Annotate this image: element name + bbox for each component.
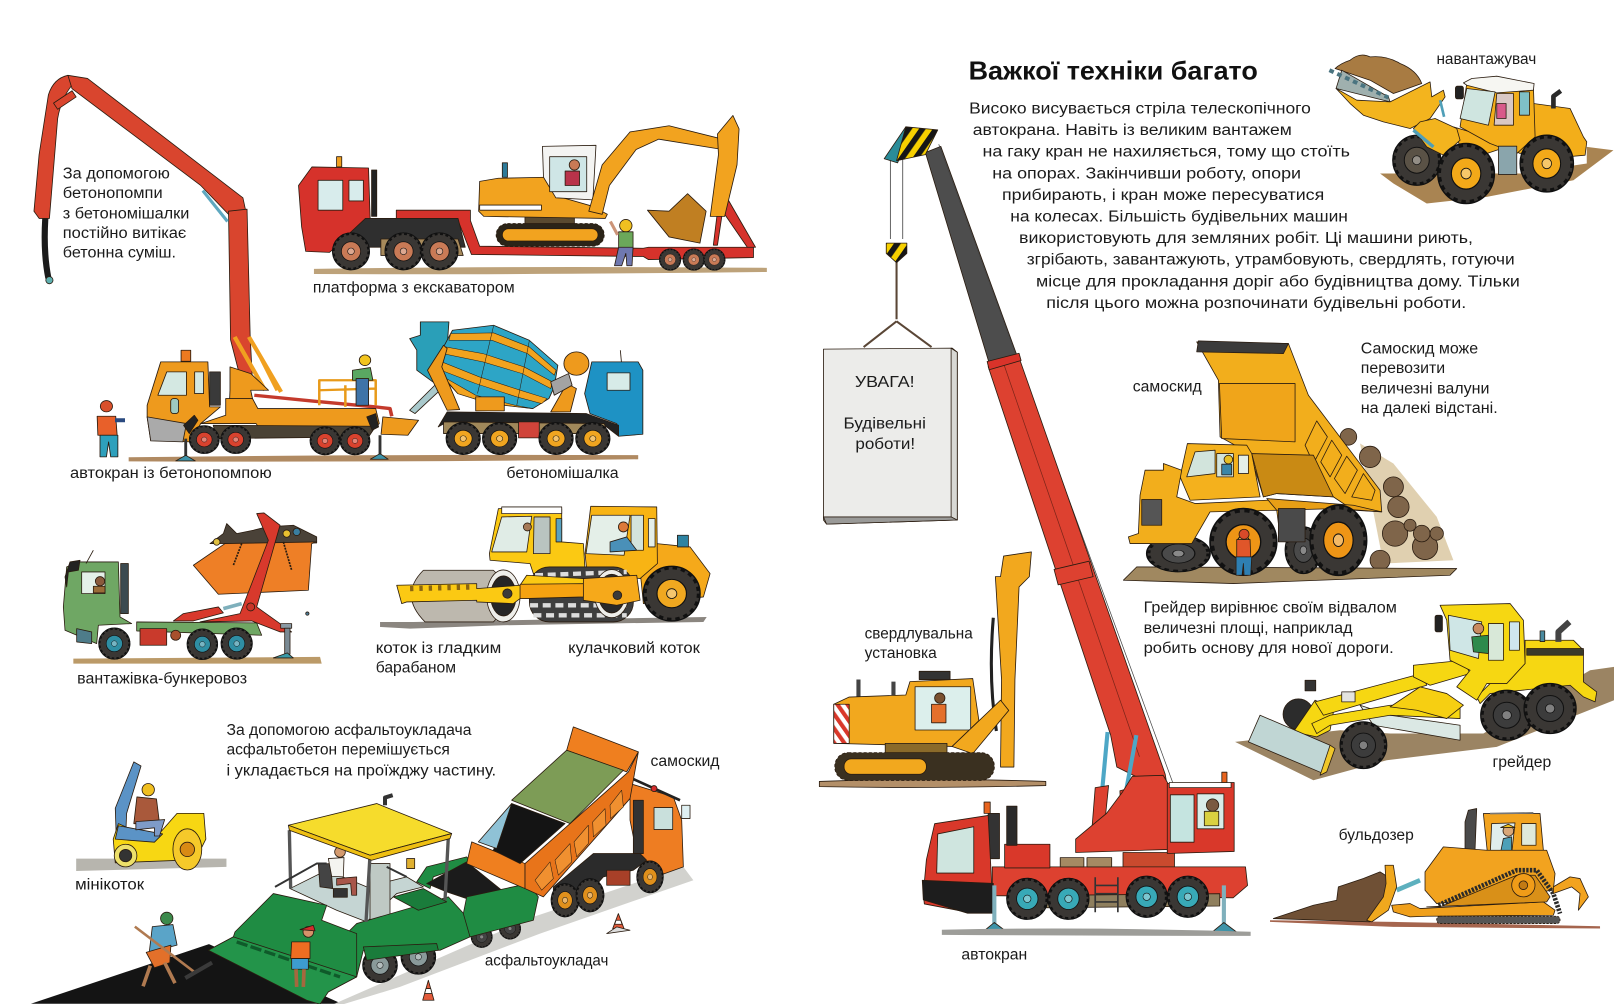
text: concrete pump note: бетонна суміш. [63, 245, 176, 262]
worker [1236, 529, 1252, 575]
concrete pump truck [97, 337, 419, 461]
curb [76, 859, 226, 871]
dust [1360, 444, 1453, 564]
text: concrete pump note [63, 165, 189, 262]
bucket inner [1336, 70, 1390, 102]
asphalt road [31, 944, 342, 1004]
first cab [489, 509, 585, 574]
rear body [640, 544, 710, 604]
remote worker [97, 401, 125, 457]
ground: pump and mixer [129, 455, 638, 462]
bed [1197, 342, 1382, 512]
rear body [1477, 640, 1597, 704]
text: padfoot roller label: кулачковий коток [568, 640, 700, 657]
text: flatbed label: платформа з екскаватором [313, 280, 515, 297]
cab [1440, 604, 1525, 700]
hydraulic [223, 604, 242, 609]
cab [1180, 444, 1260, 500]
blade arm [1397, 880, 1420, 890]
ground [73, 657, 322, 664]
frame [397, 575, 583, 604]
arm [200, 513, 292, 632]
text: main paragraph: Високо висувається стріла телескопічного [969, 100, 1311, 117]
text: main paragraph: місце для прокладання доріг або будівництва дому. Тільки [1036, 273, 1520, 290]
skip [193, 542, 317, 594]
railing [319, 380, 376, 407]
text: grader note [1144, 600, 1397, 657]
wheels [1340, 684, 1576, 769]
main frame [347, 897, 470, 977]
traffic cones [607, 914, 630, 934]
chassis [438, 412, 619, 436]
body [113, 813, 206, 863]
text: grader note: робить основу для нової дороги. [1144, 640, 1394, 657]
body [834, 679, 979, 746]
excavator boom [589, 126, 729, 214]
mirror and lamp [1305, 680, 1316, 691]
text: loader label: навантажувач [1436, 51, 1536, 68]
asphalt load [493, 804, 565, 864]
canopy poles [289, 830, 448, 922]
exhaust [1465, 809, 1477, 850]
wheels [1210, 505, 1367, 575]
skip loader truck [63, 513, 322, 664]
text: grader note: Грейдер вирівнює своїм відвалом [1144, 600, 1397, 617]
pedestal [229, 367, 269, 407]
text: bulldozer label: бульдозер [1339, 827, 1414, 844]
text: paver note: асфальтобетон перемішується [226, 742, 450, 759]
front frame joint [1293, 700, 1333, 737]
crane cabin [1167, 782, 1234, 854]
screed [208, 937, 357, 1004]
warning sign [823, 348, 957, 524]
operator [335, 847, 345, 857]
chassis [201, 399, 379, 427]
second cab [585, 506, 657, 579]
cab [63, 562, 132, 644]
outriggers [994, 885, 1224, 929]
back front wheel [1283, 699, 1314, 730]
ground [380, 617, 707, 629]
track upper [1438, 870, 1560, 914]
dump bed end [467, 842, 525, 889]
front blade [1248, 715, 1330, 774]
text: mini roller label: мінікоток [75, 877, 144, 894]
bulldozer [1270, 809, 1600, 929]
crane wheels [1007, 876, 1208, 919]
rig ground [819, 779, 1046, 787]
text: main paragraph [969, 100, 1520, 312]
boom upper [925, 146, 1018, 367]
concrete mixer truck [410, 322, 643, 455]
cab [585, 362, 643, 436]
dump bed top board [567, 727, 638, 772]
canopy [288, 804, 452, 855]
rocks [1340, 429, 1443, 570]
text: dump truck note: на далекі відстані. [1361, 400, 1498, 417]
hoist cables [890, 155, 903, 239]
bucket [1336, 82, 1445, 129]
text: paver note: і укладається на проїжджу частину. [226, 762, 496, 779]
text: smooth roller label: барабаном [376, 659, 456, 676]
dump bed side [525, 752, 638, 897]
text: concrete pump note: з бетономішалки [63, 205, 189, 222]
wheels [189, 426, 370, 455]
ground: crane [942, 929, 1251, 936]
trailer [396, 210, 753, 260]
body [1453, 104, 1587, 157]
hatch [410, 322, 449, 382]
lift arm [1413, 119, 1460, 155]
text: main paragraph: на опорах. Закінчивши роботу, опори [992, 165, 1301, 182]
boom arms [34, 75, 76, 218]
text: concrete pump note: бетонопомпи [63, 185, 163, 202]
text: dump truck note: Самоскид може [1361, 340, 1478, 357]
ground [1235, 667, 1614, 780]
cylinders [235, 337, 281, 392]
flatbed truck with excavator [299, 115, 756, 270]
exhausts [858, 680, 893, 697]
wheel loader [1329, 55, 1613, 204]
crane cab [923, 815, 992, 912]
boom link [952, 700, 1009, 754]
mast [995, 552, 1031, 767]
wheels [1438, 135, 1573, 204]
driver [142, 784, 154, 796]
mid blade [1360, 705, 1460, 740]
frame [1267, 499, 1382, 512]
tarp [512, 750, 623, 824]
front box [463, 884, 538, 937]
broom worker [135, 912, 212, 986]
rig cab [915, 687, 971, 730]
blade [1367, 865, 1397, 922]
wheels behind [1393, 135, 1441, 185]
wheels [99, 628, 252, 660]
text: dump truck label right: самоскид [1133, 378, 1202, 395]
road shoulder [333, 867, 693, 1004]
motor grader [1235, 604, 1614, 780]
text: rig label: установка [865, 645, 937, 662]
paver and dump truck [208, 727, 693, 1004]
mini roller [76, 762, 226, 871]
cab [147, 362, 220, 442]
inner wheels [1147, 527, 1322, 574]
smooth drum [411, 570, 507, 622]
jack [281, 624, 292, 628]
rollers [380, 506, 710, 629]
text: paver note: За допомогою асфальтоукладача [226, 722, 472, 739]
text: main paragraph: автокрана. Навіть із великим вантажем [973, 122, 1292, 139]
frame [1315, 674, 1427, 715]
text: dump truck note: перевозити [1361, 360, 1445, 377]
steps [1498, 146, 1517, 175]
text: dump truck note: величезні валуни [1361, 380, 1489, 397]
crane head [884, 127, 912, 163]
mining dump truck [1123, 341, 1457, 584]
text: dump truck note [1361, 340, 1498, 417]
text: grader note: величезні площі, наприклад [1144, 620, 1353, 637]
seat pole [115, 762, 141, 839]
text: main paragraph: використовують для земляних робіт. Ці машини риють, [1019, 230, 1473, 247]
text: concrete pump note: постійно витікає [63, 225, 186, 242]
debris [210, 524, 317, 544]
deck [992, 867, 1248, 898]
truck cab [630, 784, 683, 875]
engine box and exhaust [1005, 844, 1050, 868]
hopper asphalt [427, 862, 502, 899]
tractor cab [299, 167, 371, 252]
ground [1123, 567, 1457, 584]
track lower [1437, 916, 1560, 924]
ground [1380, 147, 1613, 204]
truck chassis [553, 854, 647, 910]
red pipe [254, 395, 392, 416]
hopper rim [417, 857, 472, 889]
deck [208, 894, 357, 992]
dirt [1335, 55, 1422, 94]
hook block [886, 243, 907, 263]
ground: flatbed [314, 267, 767, 274]
text: main paragraph: згрібають, завантажують, утрамбовують, свердлять, готуючи [1027, 252, 1515, 269]
paver wheels [363, 940, 436, 983]
text: sign: Будівельні [844, 415, 926, 432]
title: Важкої техніки багато [969, 57, 1258, 85]
text: main paragraph: після цього можна розпочинати будівельні роботи. [1046, 295, 1466, 312]
cab [1483, 814, 1543, 862]
text: paver label: асфальтоукладач [485, 953, 608, 970]
paver worker [291, 925, 315, 987]
drilling rig [819, 552, 1046, 787]
drum [436, 325, 558, 409]
padfoot drum [529, 567, 633, 622]
text: dump truck label: самоскид [651, 753, 720, 770]
text: sign: роботи! [855, 436, 915, 453]
excavator bucket [647, 194, 706, 243]
text: main paragraph: на гаку кран не нахиляється, тому що стоїть [983, 144, 1350, 161]
truck wheels [551, 861, 663, 917]
text: main paragraph: на колесах. Більшість будівельних машин [1010, 209, 1348, 226]
platform worker [352, 355, 373, 405]
front support [427, 345, 460, 410]
text: paver note [226, 722, 496, 779]
text: sign [844, 374, 926, 453]
text: smooth roller label [376, 640, 501, 676]
text: sign: УВАГА! [855, 374, 915, 391]
text: mixer label: бетономішалка [506, 465, 619, 482]
ripper [1553, 877, 1588, 910]
ladder [1095, 877, 1118, 912]
ground [1270, 920, 1600, 929]
water drops [306, 612, 309, 615]
dirt [1273, 872, 1393, 922]
text: grader label: грейдер [1493, 754, 1552, 771]
worker signalling [610, 219, 633, 266]
hopper [381, 417, 419, 435]
crane and warning sign [823, 127, 1248, 932]
text: concrete pump note: За допомогою [63, 165, 170, 182]
text: pump label: автокран із бетонопомпою [70, 465, 272, 482]
chassis [137, 622, 262, 635]
concrete pump boom [34, 75, 252, 376]
excavator body [479, 177, 607, 218]
text: rig label [865, 625, 973, 662]
text: rig label: свердлувальна [865, 625, 973, 642]
outriggers [184, 414, 379, 434]
body [1425, 847, 1555, 904]
tractor wheels [332, 233, 725, 270]
lift cylinders [1102, 732, 1136, 791]
cab [1460, 84, 1535, 154]
rollers [114, 844, 137, 867]
wheels [446, 423, 610, 455]
text: smooth roller label: коток із гладким [376, 640, 501, 657]
excavator tracks [496, 224, 604, 246]
turret [1076, 775, 1173, 852]
text: skip label: вантажівка-бункеровоз [77, 671, 247, 688]
engine [1128, 464, 1280, 544]
rear wheel [643, 566, 700, 621]
text: crane label: автокран [961, 947, 1027, 964]
text: main paragraph: прибирають, і кран може пересуватися [1002, 187, 1324, 204]
hose [45, 218, 48, 278]
tracks [835, 753, 994, 780]
boom lower [988, 360, 1168, 793]
platform [290, 870, 423, 922]
